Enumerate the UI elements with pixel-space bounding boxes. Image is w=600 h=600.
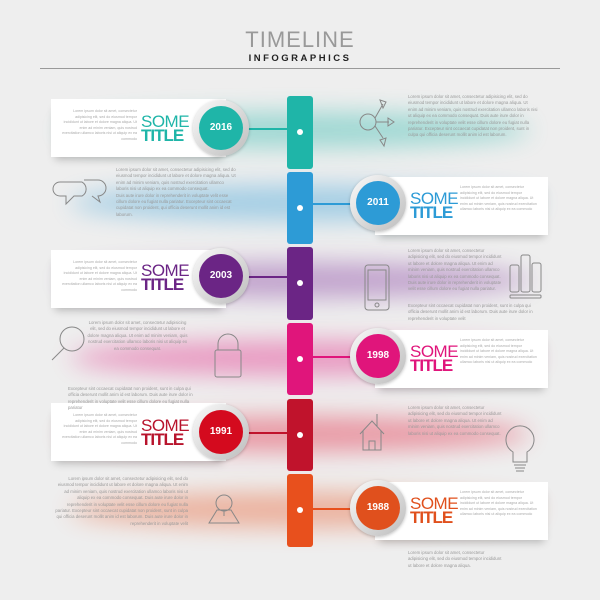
text: Lorem ipsum dolor sit amet, consectetur adipisicing elit, sed do eiusmod tempor incididunt ut labore et dolore magna aliqua. Ut enim ad minim veniam, quis nostrud exercitation ullamco laboris nisi ut aliquip ex ea commodo consequat. [408, 405, 501, 436]
card 1998: 1998 [367, 350, 389, 361]
card 2016: 2016 [210, 122, 232, 133]
card 2016: Lorem ipsum dolor sit amet, consectetur adipisicing elit, sed do eiusmod tempor incididunt ut labore et dolore magna aliqua. Ut enim ad minim veniam, quis nostrud exercitation ullamco laboris nisi ut aliquip ex ea commodo [62, 109, 137, 140]
text blocks: Lorem ipsum dolor sit amet, consectetur adipisicing elit, sed do eiusmod tempor incididunt ut labore et dolore magna aliqua. Ut enim ad minim veniam, quis nostrud exercitation ullamco laboris nisi ut aliquip ex ea commodo consequat. Duis aute irure dolor in reprehenderit in voluptate velit esse cillum dolore eu fugiat nulla pariatur. Excepteur sint occaecat cupidatat non proident, sunt in culpa qui officia deserunt mollit anim id est laborum. [408, 94, 537, 137]
text: Duis aute irure dolor in reprehenderit in voluptate velit esse cillum dolore eu fugiat nulla pariatur. Excepteur sint occaecat cupidatat non proident, qui officia deserunt mollit anim id est laborum. [116, 193, 232, 217]
icon: house [360, 414, 384, 450]
card 1988: 1988 [367, 502, 389, 513]
icon: tablet [365, 265, 389, 310]
card 1991: TITLE [141, 430, 183, 449]
card 1991 [50, 403, 287, 468]
card 2016: TITLE [141, 126, 183, 145]
card 2003: SOME [141, 261, 189, 280]
card 1998: TITLE [410, 356, 452, 375]
icon: magnifier [52, 327, 84, 360]
icon: light bulb [506, 426, 534, 471]
text: Lorem ipsum dolor sit amet, consectetur adipisicing elit, sed do eiusmod tempor incididunt ut labore et dolore magna aliqua. [408, 550, 501, 568]
card 2011: Lorem ipsum dolor sit amet, consectetur adipisicing elit, sed do eiusmod tempor incididunt ut labore et dolore magna aliqua. Ut enim ad minim veniam, quis nostrud exercitation ullamco laboris nisi ut aliquip ex ea commodo [460, 185, 537, 211]
card 2003 [50, 248, 287, 314]
card 1988 [313, 480, 548, 546]
text: Lorem ipsum dolor sit amet, consectetur adipisicing elit, sed do eiusmod tempor incididunt ut labore et dolore magna aliqua. Ut enim ad minim veniam, quis nostrud exercitation ullamco laboris nisi ut aliquip ex ea commodo consequat. Duis aute irure dolor in reprehenderit in voluptate velit esse cillum dolore eu fugiat nulla pariatur. Excepteur sint occaecat cupidatat non proident, sunt in culpa qui officia deserunt mollit anim id est laborum. Duis aute irure dolor in reprehenderit in voluptate velit [55, 476, 188, 526]
title: TIMELINE [245, 27, 355, 52]
card 2016: SOME [141, 112, 189, 131]
timeline column [287, 96, 313, 547]
card 1988: SOME [410, 494, 458, 513]
card 1998: Lorem ipsum dolor sit amet, consectetur adipisicing elit, sed do eiusmod tempor incididunt ut labore et dolore magna aliqua. Ut enim ad minim veniam, quis nostrud exercitation ullamco laboris nisi ut aliquip ex ea commodo [460, 338, 537, 364]
card 2016 [50, 99, 287, 164]
card 2003: TITLE [141, 275, 183, 294]
card 1988: Lorem ipsum dolor sit amet, consectetur adipisicing elit, sed do eiusmod tempor incididunt ut labore et dolore magna aliqua. Ut enim ad minim veniam, quis nostrud exercitation ullamco laboris nisi ut aliquip ex ea commodo [460, 490, 537, 516]
card 2011: SOME [410, 189, 458, 208]
icon: share [360, 100, 394, 146]
icon: padlock [215, 334, 241, 377]
text: Lorem ipsum dolor sit amet, consectetur adipisicing elit, sed do eiusmod tempor incididunt ut labore et dolore magna aliqua. Ut enim ad minim veniam, quis nostrud exercitation ullamco laboris nisi ut aliquip ex ea commodo consequat. Duis aute irure dolor in reprehenderit in voluptate velit esse cillum dolore eu fugiat nulla pariatur. [408, 248, 501, 291]
card 1988: TITLE [410, 508, 452, 527]
card 1991: 1991 [210, 426, 232, 437]
card 1998: SOME [410, 342, 458, 361]
title [245, 27, 355, 64]
card 2011: TITLE [410, 203, 452, 222]
text: Excepteur sint occaecat cupidatat non proident, sunt in culpa qui officia deserunt mollit anim id est laborum. Duis aute irure dolor in reprehenderit in voluptate velit esse cillum dolore eu fugiat nulla pariatur [68, 386, 193, 410]
text: Lorem ipsum dolor sit amet, consectetur adipisicing elit, sed do eiusmod tempor incididunt ut labore et dolore magna aliqua. Ut enim ad minim veniam, quis nostrud exercitation ullamco laboris nisi ut aliquip ex ea commodo consequat. [116, 167, 236, 191]
card 2003: 2003 [210, 270, 232, 281]
card 1991: SOME [141, 416, 189, 435]
card 2011 [313, 174, 548, 242]
text: Excepteur sint occaecat cupidatat non proident, sunt in culpa qui officia deserunt mollit anim id est laborum. Duis aute irure dolor in reprehenderit in voluptate velit [408, 303, 533, 321]
text: Lorem ipsum dolor sit amet, consectetur adipisicing elit, sed do eiusmod tempor incididunt ut labore et dolore magna aliqua. Ut enim ad minim veniam, quis nostrud exercitation ullamco laboris nisi ut aliquip ex ea commodo consequat. [87, 320, 188, 351]
icon: bar chart [510, 255, 541, 298]
card 2011: 2011 [367, 197, 389, 208]
icon: speech bubbles [53, 180, 106, 204]
card 2003: Lorem ipsum dolor sit amet, consectetur adipisicing elit, sed do eiusmod tempor incididunt ut labore et dolore magna aliqua. Ut enim ad minim veniam, quis nostrud exercitation ullamco laboris nisi ut aliquip ex ea commodo [62, 260, 137, 292]
card 1998 [313, 328, 548, 394]
icon: person [209, 495, 239, 523]
title: INFOGRAPHICS [249, 53, 351, 64]
card 1991: Lorem ipsum dolor sit amet, consectetur adipisicing elit, sed do eiusmod tempor incididunt ut labore et dolore magna aliqua. Ut enim ad minim veniam, quis nostrud exercitation ullamco laboris nisi ut aliquip ex ea commodo [62, 413, 137, 444]
